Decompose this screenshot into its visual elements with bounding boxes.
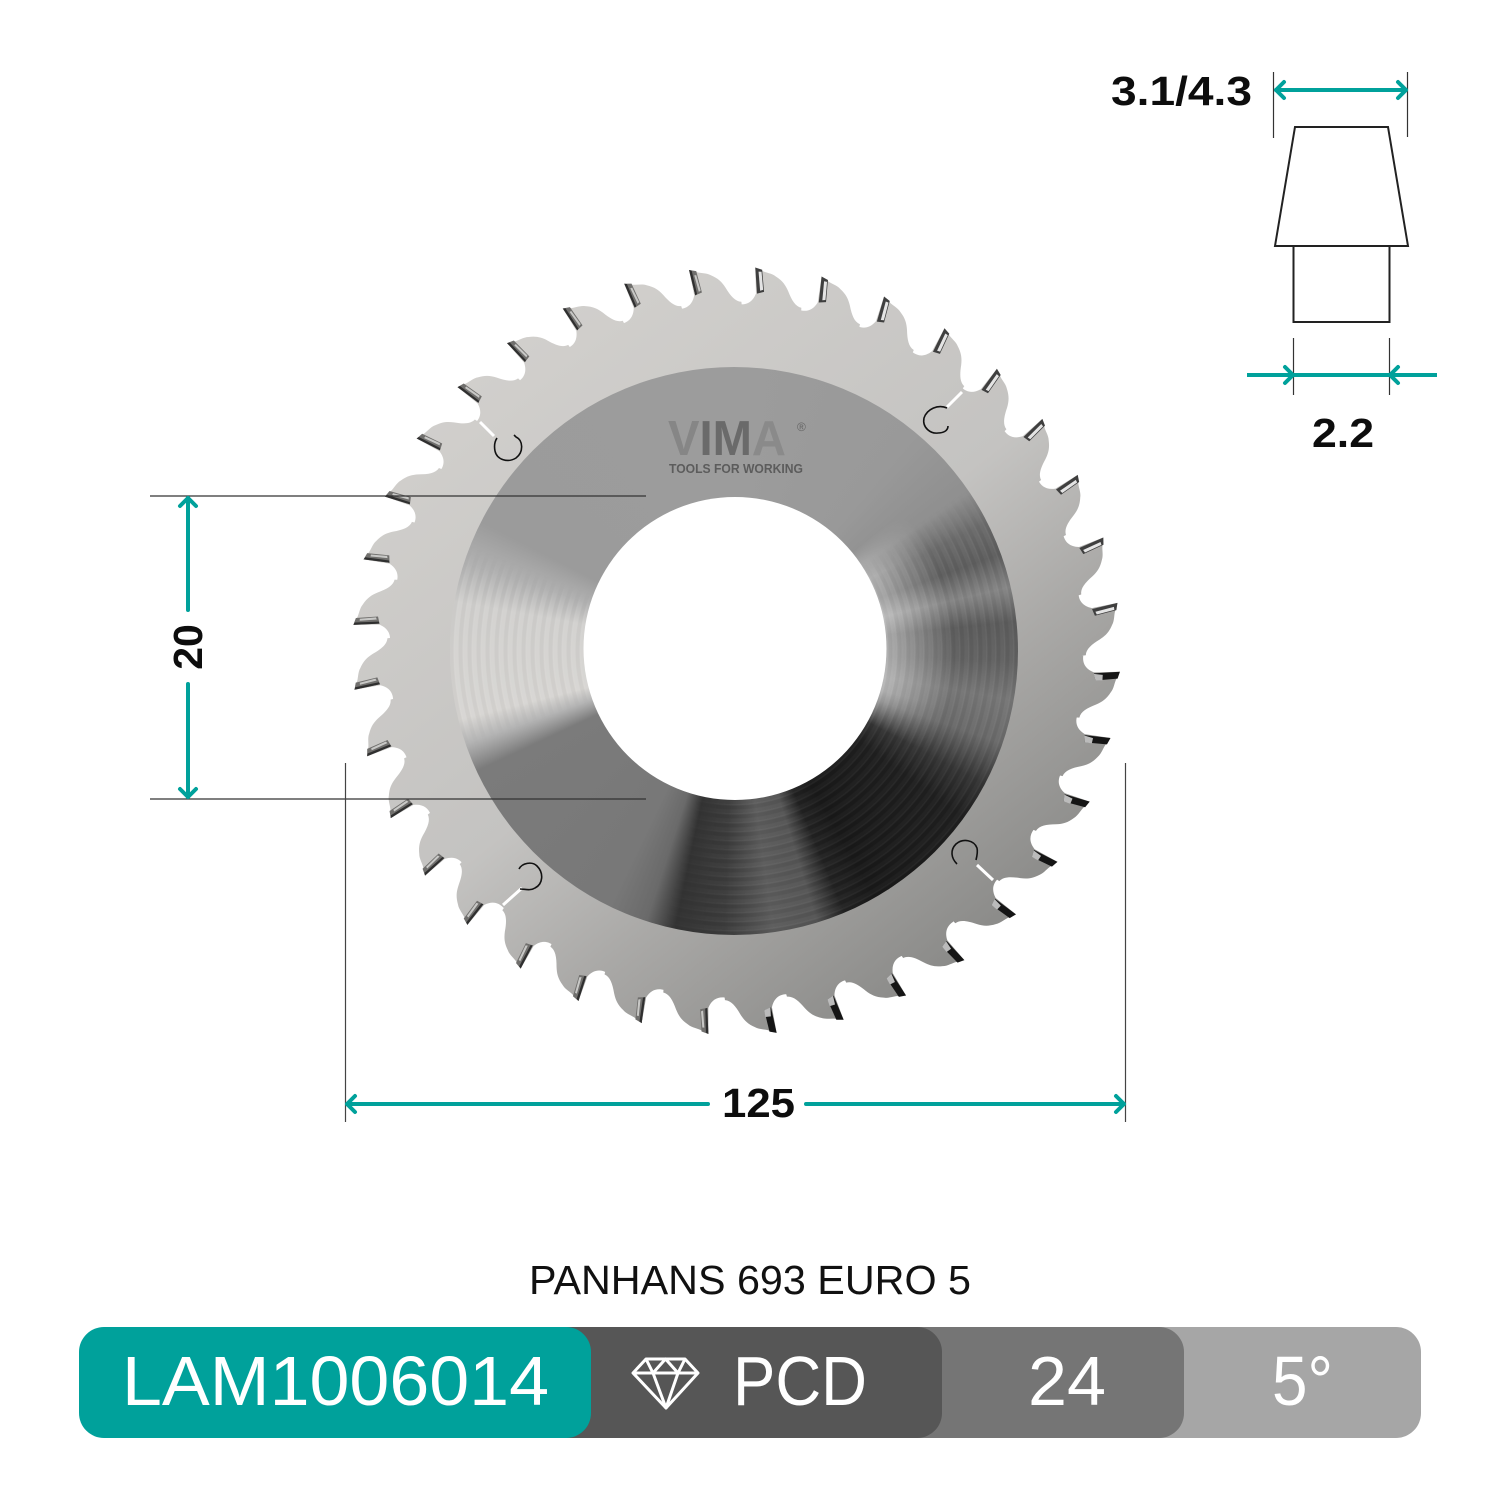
spec code text: LAM1006014	[122, 1342, 549, 1420]
spec: angle segment	[1100, 1327, 1421, 1438]
extension lines: bore diameter	[150, 496, 646, 799]
material text: PCD	[733, 1342, 867, 1420]
centre bore	[584, 497, 886, 800]
extension lines: blade diameter	[346, 763, 1126, 1122]
arrow: tooth top width	[1276, 82, 1406, 98]
label: 3.1/4.3: 3.1/4.3	[1111, 68, 1252, 114]
tooth profile drawing	[1275, 127, 1408, 322]
logo: VIMA: ®	[797, 420, 806, 434]
label: 20: 20	[165, 624, 211, 670]
hub highlight near bore	[856, 540, 948, 732]
arrow: blade dimension 125	[347, 1096, 1124, 1112]
extension lines: tooth width	[1274, 72, 1408, 395]
teeth count text: 24	[1028, 1342, 1106, 1420]
conical hub shading of the blade	[450, 367, 1018, 935]
arrows: tooth body width	[1247, 367, 1437, 383]
expansion slot: top right	[924, 392, 962, 433]
label: 2.2: 2.2	[1312, 410, 1374, 456]
arrow: bore dimension 20	[180, 498, 196, 797]
angle text: 5°	[1272, 1342, 1333, 1420]
spec: material segment	[500, 1327, 942, 1438]
spec: teeth segment	[850, 1327, 1184, 1438]
spec: code segment	[79, 1327, 591, 1438]
expansion slot: top left	[480, 422, 522, 460]
expansion slot: bottom left	[503, 863, 542, 905]
subtitle: machine model: PANHANS 693 EURO 5	[529, 1257, 971, 1303]
label: 125: 125	[722, 1080, 795, 1126]
logo: VIMA: VIMA	[668, 412, 786, 466]
logo: VIMA: TOOLS FOR WORKING	[669, 461, 803, 476]
icon: diamond	[633, 1359, 698, 1408]
hub machining rings	[726, 718, 990, 931]
expansion slot: bottom right	[952, 841, 993, 880]
saw blade body with teeth	[353, 268, 1120, 1034]
spec bar	[79, 1327, 1421, 1438]
